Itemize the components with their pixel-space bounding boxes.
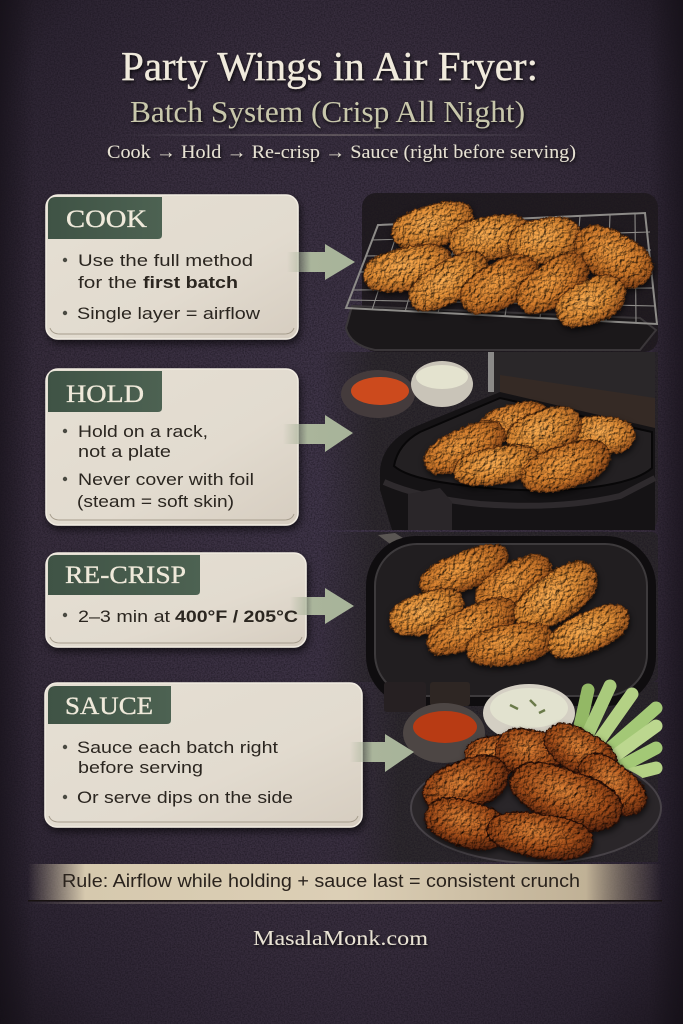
photo: open basket re-crisp bbox=[366, 533, 656, 706]
panel: hold bbox=[46, 369, 298, 525]
tab bbox=[48, 371, 162, 412]
website footer: MasalaMonk.com bbox=[253, 926, 428, 950]
sauce bowl bbox=[341, 370, 415, 418]
photo: sauced wings plate bbox=[384, 682, 661, 865]
card bbox=[45, 683, 362, 827]
process line: Cook → Hold → Re-crisp → Sauce (right before serving) bbox=[107, 142, 576, 163]
bullets: (steam = soft skin) bbox=[77, 493, 234, 511]
arrow: hold bbox=[283, 415, 353, 452]
arrow: sauce bbox=[350, 734, 414, 772]
bullets: Use the full method bbox=[78, 252, 253, 270]
panel: re-crisp bbox=[46, 553, 306, 647]
card bbox=[46, 553, 306, 647]
arrow: re-crisp bbox=[290, 588, 354, 624]
bullets: Single layer = airflow bbox=[77, 305, 260, 323]
label: RE-CRISP bbox=[65, 562, 186, 589]
basket bbox=[366, 536, 656, 706]
ranch bowl bbox=[411, 361, 473, 407]
bullets: Hold on a rack, bbox=[78, 423, 208, 441]
bullets: Or serve dips on the side bbox=[77, 789, 293, 807]
wings bbox=[360, 195, 661, 337]
wings bbox=[384, 536, 636, 672]
label: COOK bbox=[66, 206, 147, 233]
basket handle bbox=[408, 488, 452, 530]
bullets: first batch bbox=[143, 274, 238, 292]
celery bbox=[578, 686, 656, 774]
bullets: for the bbox=[78, 274, 137, 292]
bullets: before serving bbox=[78, 759, 203, 777]
bullets: not a plate bbox=[78, 443, 171, 461]
wings bbox=[416, 714, 655, 865]
wings bbox=[417, 396, 636, 502]
photo: wings on rack bbox=[346, 195, 661, 350]
basket inner bbox=[394, 398, 652, 490]
rule banner bbox=[28, 864, 662, 904]
sauce bowl bbox=[403, 703, 485, 763]
baking tray bbox=[346, 306, 656, 350]
ranch bowl bbox=[483, 684, 575, 742]
panel: cook bbox=[46, 195, 298, 339]
bullets: Never cover with foil bbox=[78, 471, 254, 489]
plate bbox=[411, 753, 661, 863]
label: SAUCE bbox=[65, 693, 153, 720]
bullets bbox=[63, 739, 293, 807]
tab bbox=[48, 197, 162, 239]
card bbox=[46, 369, 298, 525]
bullet: re-crisp: 400°F / 205°C bbox=[175, 608, 298, 626]
panel: sauce bbox=[45, 683, 362, 827]
arrow: cook bbox=[287, 244, 355, 280]
subtitle: Batch System (Crisp All Night) bbox=[130, 94, 525, 129]
tab bbox=[48, 686, 171, 724]
title: Party Wings in Air Fryer: bbox=[121, 43, 538, 89]
bullets bbox=[63, 252, 260, 323]
wire rack bbox=[346, 213, 657, 324]
label: HOLD bbox=[66, 381, 144, 408]
bullet: re-crisp bbox=[63, 608, 298, 626]
rim lip bbox=[384, 478, 655, 506]
fryer body bbox=[490, 352, 655, 432]
card bbox=[46, 195, 298, 339]
bullets: Sauce each batch right bbox=[77, 739, 278, 757]
photo: fryer basket with dips bbox=[341, 352, 655, 530]
basket body bbox=[380, 392, 655, 530]
pepper jars bbox=[384, 682, 470, 712]
rule text: Rule: Airflow while holding + sauce last = consistent crunch bbox=[62, 870, 580, 891]
bullets bbox=[63, 423, 254, 511]
basket handle stub bbox=[378, 533, 425, 560]
tab bbox=[48, 555, 200, 595]
bullet: re-crisp: 2–3 min at bbox=[78, 608, 170, 626]
